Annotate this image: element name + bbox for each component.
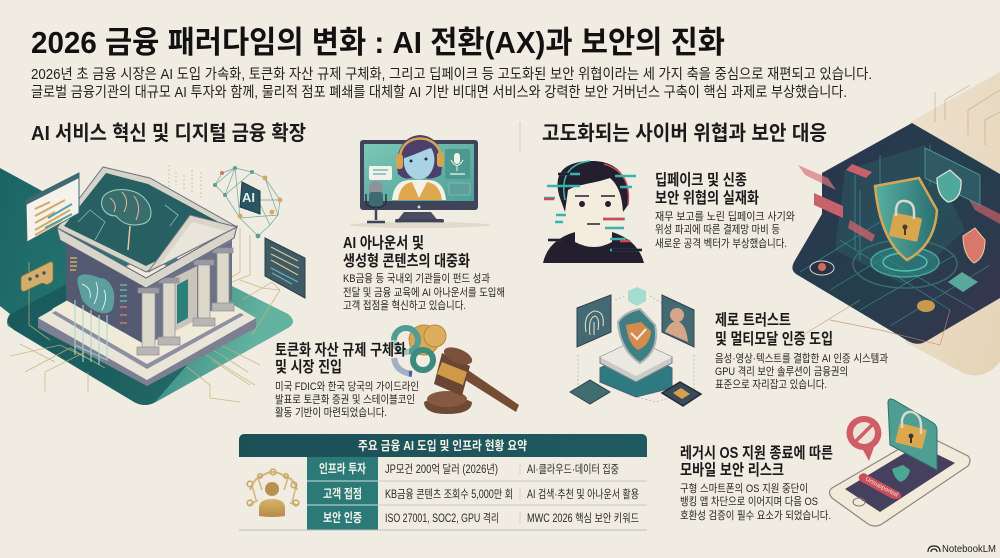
orange-red shield <box>963 228 985 263</box>
main shield <box>875 178 937 260</box>
text: zero trust: 및 멀티모달 인증 도입 <box>715 330 833 348</box>
voice panel <box>445 149 470 179</box>
intro text <box>31 66 872 101</box>
text: legacy OS: 뱅킹 앱 차단으로 이어지며 다음 OS <box>680 495 818 508</box>
prohibition sign <box>846 416 881 461</box>
floating code window <box>26 173 79 242</box>
text: legacy OS: 호환성 검증이 필수 요소가 되었습니다. <box>680 509 831 522</box>
face panel <box>662 295 694 347</box>
steps <box>38 253 256 386</box>
text: deepfake: 새로운 공격 벡터가 부상했습니다. <box>655 237 787 250</box>
speech card <box>369 166 392 180</box>
chip <box>662 382 701 406</box>
text: zero trust <box>715 311 888 391</box>
text: AI announcer: 생성형 콘텐츠의 대중화 <box>343 252 470 270</box>
illustration: cyber security platform <box>792 72 1000 376</box>
roof brain <box>78 190 178 250</box>
text: deepfake: 보안 위협의 실재화 <box>655 189 759 207</box>
AI neural network <box>213 166 282 238</box>
table rows: KB금융 콘텐츠 조회수 5,000만 회 <box>385 488 513 501</box>
text: AI announcer: 고객 접점을 혁신하고 있습니다. <box>343 298 466 312</box>
table rows: ISO 27001, SOC2, GPU 격리 <box>385 511 499 525</box>
text: deepfake <box>655 171 795 250</box>
intro text: 2026년 초 금융 시장은 AI 도입 가속화, 토큰화 자산 규제 구체화, 그리고 딥페이크 등 고도화된 보안 위협이라는 세 가지 축을 중심으로 재편되고 있습니다. <box>31 66 872 83</box>
pediment <box>148 215 237 272</box>
lock card <box>888 399 937 470</box>
icon: gold person network <box>247 469 299 517</box>
NotebookLM watermark: NotebookLM <box>942 543 996 555</box>
text: deepfake: 위성 파괴에 따른 결제망 마비 등 <box>655 223 780 236</box>
text: legacy OS: 레거시 OS 지원 종료에 따른 <box>680 444 833 462</box>
text: AI announcer <box>343 234 505 312</box>
presenter <box>392 180 446 200</box>
red warning banner <box>859 473 901 499</box>
text: tokenized asset regulation: 토큰화 자산 규제 구체화 <box>275 341 406 359</box>
left wall <box>66 240 146 345</box>
illustration: smartphone with warning <box>830 399 970 526</box>
intro text: 글로벌 금융기관의 대규모 AI 투자와 함께, 물리적 점포 폐쇄를 대체할 AI 기반 비대면 서비스와 강력한 보안 거버넌스 구축이 핵심 과제로 부상했습니다. <box>31 84 847 101</box>
table header <box>239 434 647 457</box>
text: tokenized asset regulation: 미국 FDIC와 한국 당국의 가이드라인 <box>275 380 419 393</box>
text: tokenized asset regulation: 발표로 토큰화 증권 및 스테이블코인 <box>275 393 415 406</box>
text: tokenized asset regulation: 활동 기반이 마련되었습니다. <box>275 405 387 419</box>
illustration: AI bank building <box>0 165 305 405</box>
row label cells: 인프라 투자 <box>319 462 366 476</box>
floating dark code panel <box>265 238 305 298</box>
glitch strips <box>544 174 642 250</box>
text: legacy OS <box>680 444 833 522</box>
floating alert strips <box>798 148 1000 242</box>
table rows: MWC 2026 핵심 보안 키워드 <box>527 512 639 525</box>
shield <box>618 309 656 363</box>
summary table <box>239 434 647 530</box>
fingerprint panel <box>577 295 611 347</box>
table rows: AI·클라우드·데이터 집중 <box>527 463 619 476</box>
text: legacy OS: 구형 스마트폰의 OS 지원 중단이 <box>680 482 808 495</box>
table rows: JP모건 200억 달러 (2026년) <box>385 462 498 476</box>
small tile <box>570 380 610 404</box>
title: 2026 금융 패러다임의 변화 : AI 전환(AX)과 보안의 진화 <box>31 25 725 60</box>
table rows <box>385 462 639 525</box>
hex badge <box>628 287 646 306</box>
row label cells: 고객 접점 <box>323 487 362 501</box>
small shield <box>937 170 961 202</box>
illustration: coins, token rings and gavel <box>394 325 519 414</box>
text: AI announcer: KB금융 등 국내외 기관들이 펀드 성과 <box>343 272 490 285</box>
text: zero trust: GPU 격리 보안 솔루션이 금융권의 <box>715 365 848 378</box>
circuit lines <box>10 165 280 402</box>
text: deepfake: 딥페이크 및 신종 <box>655 171 747 189</box>
entablature <box>57 226 237 288</box>
heading: left section: AI 서비스 혁신 및 디지털 금융 확장 <box>31 122 306 145</box>
text: tokenized asset regulation: 및 시장 진입 <box>275 358 342 376</box>
roof <box>57 167 237 272</box>
chat bubble <box>21 262 53 291</box>
wall data bars <box>70 258 127 323</box>
table rows: AI 검색·추천 및 아나운서 활용 <box>527 487 639 501</box>
row label cells: 보안 인증 <box>323 511 362 525</box>
text: tokenized asset regulation <box>273 340 419 419</box>
microphone <box>369 181 383 203</box>
red warning banner: Unsupported <box>864 476 899 499</box>
illustration: zero trust platform <box>570 287 701 406</box>
text: deepfake: 재무 보고를 노린 딥페이크 사기와 <box>655 210 795 223</box>
text: AI announcer: 전달 및 금융 교육에 AI 아나운서를 도입해 <box>343 285 505 299</box>
illustration: AI announcer monitor <box>350 135 490 228</box>
table header: 주요 금융 AI 도입 및 인프라 현황 요약 <box>358 438 527 453</box>
stacked platform <box>600 340 672 397</box>
hologram rings <box>853 240 957 288</box>
heading: right section: 고도화되는 사이버 위협과 보안 대응 <box>542 122 827 145</box>
text: legacy OS: 모바일 보안 리스크 <box>680 461 784 479</box>
text: zero trust: 음성·영상·텍스트를 결합한 AI 인증 시스템과 <box>715 352 888 365</box>
AI neural network: AI <box>242 190 255 205</box>
illustration: deepfake glitch face <box>543 161 644 263</box>
columns <box>137 248 234 355</box>
row label cells <box>307 457 378 530</box>
hologram brain on wall <box>75 274 114 365</box>
text: zero trust: 표준으로 자리잡고 있습니다. <box>715 378 827 391</box>
text: AI announcer: AI 아나운서 및 <box>343 234 424 252</box>
text: zero trust: 제로 트러스트 <box>715 311 791 329</box>
